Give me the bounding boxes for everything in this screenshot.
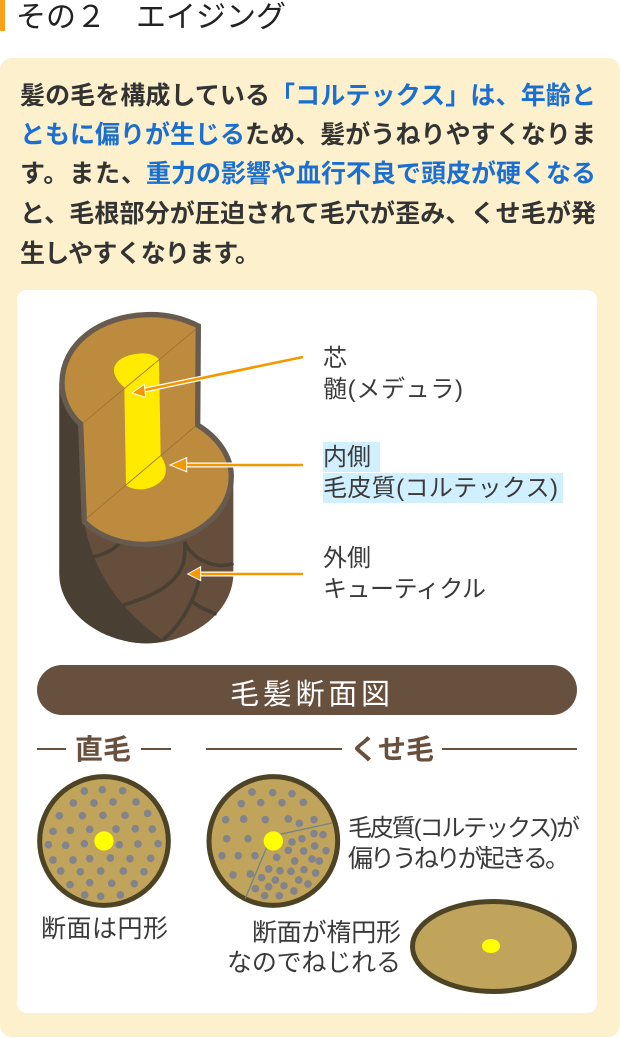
label: cuticle: 外側 (323, 545, 371, 572)
arrow: cortex (170, 458, 303, 472)
label: cortex is uneven: 毛皮質(コルテックス)が (348, 815, 580, 842)
label: medulla: 髄(メデュラ) (323, 376, 463, 403)
cross-section: straight hair (40, 777, 168, 905)
hair structure illustration (59, 315, 233, 643)
text block: explanation: 重力の影響や血行不良で頭皮が硬くなる (146, 159, 596, 188)
label: medulla (323, 345, 463, 403)
subheading: curly hair: くせ毛 (350, 734, 434, 765)
label: cortex is uneven: 偏りうねりが起きる。 (348, 845, 570, 873)
text block: explanation: 髪の毛を構成している (20, 82, 270, 110)
label: cuticle: キューティクル (323, 576, 486, 603)
cross-section: oval (412, 902, 574, 992)
text block: explanation: と、毛根部分が圧迫されて毛穴が歪み、くせ毛が発 (20, 199, 596, 228)
text block: explanation (20, 82, 596, 268)
label: oval cross-section: なのでねじれる (227, 949, 401, 977)
heading bar: hair cross-section (37, 665, 577, 715)
label: round cross-section: 断面は円形 (41, 915, 168, 943)
label: cortex: 内側 (323, 444, 371, 471)
heading bar: hair cross-section: 毛髪断面図 (230, 678, 390, 711)
label: cortex (323, 442, 563, 503)
text block: explanation: 生しやすくなります。 (20, 240, 260, 268)
subheading: straight hair (37, 734, 171, 765)
panel: diagram card (17, 290, 597, 1013)
text block: explanation: す。また、 (20, 160, 146, 188)
label: cuticle (323, 545, 486, 603)
arrow: cuticle (188, 567, 303, 581)
arrow: medulla (132, 357, 303, 397)
label: cortex is uneven (348, 815, 580, 873)
text block: explanation: ともに偏りが生じる (20, 120, 245, 149)
cross-section: curly hair (209, 777, 338, 905)
label: oval cross-section: 断面が楕円形 (252, 919, 401, 947)
text block: explanation: ため、髪がうねりやすくなりま (245, 120, 596, 149)
label: cortex: 毛皮質(コルテックス) (323, 475, 558, 502)
label: oval cross-section (227, 919, 401, 977)
section heading: その２ エイジング (16, 1, 286, 34)
subheading: straight hair: 直毛 (75, 734, 131, 765)
text block: explanation: 「コルテックス」は、年齢と (270, 82, 596, 110)
label: medulla: 芯 (323, 345, 347, 372)
